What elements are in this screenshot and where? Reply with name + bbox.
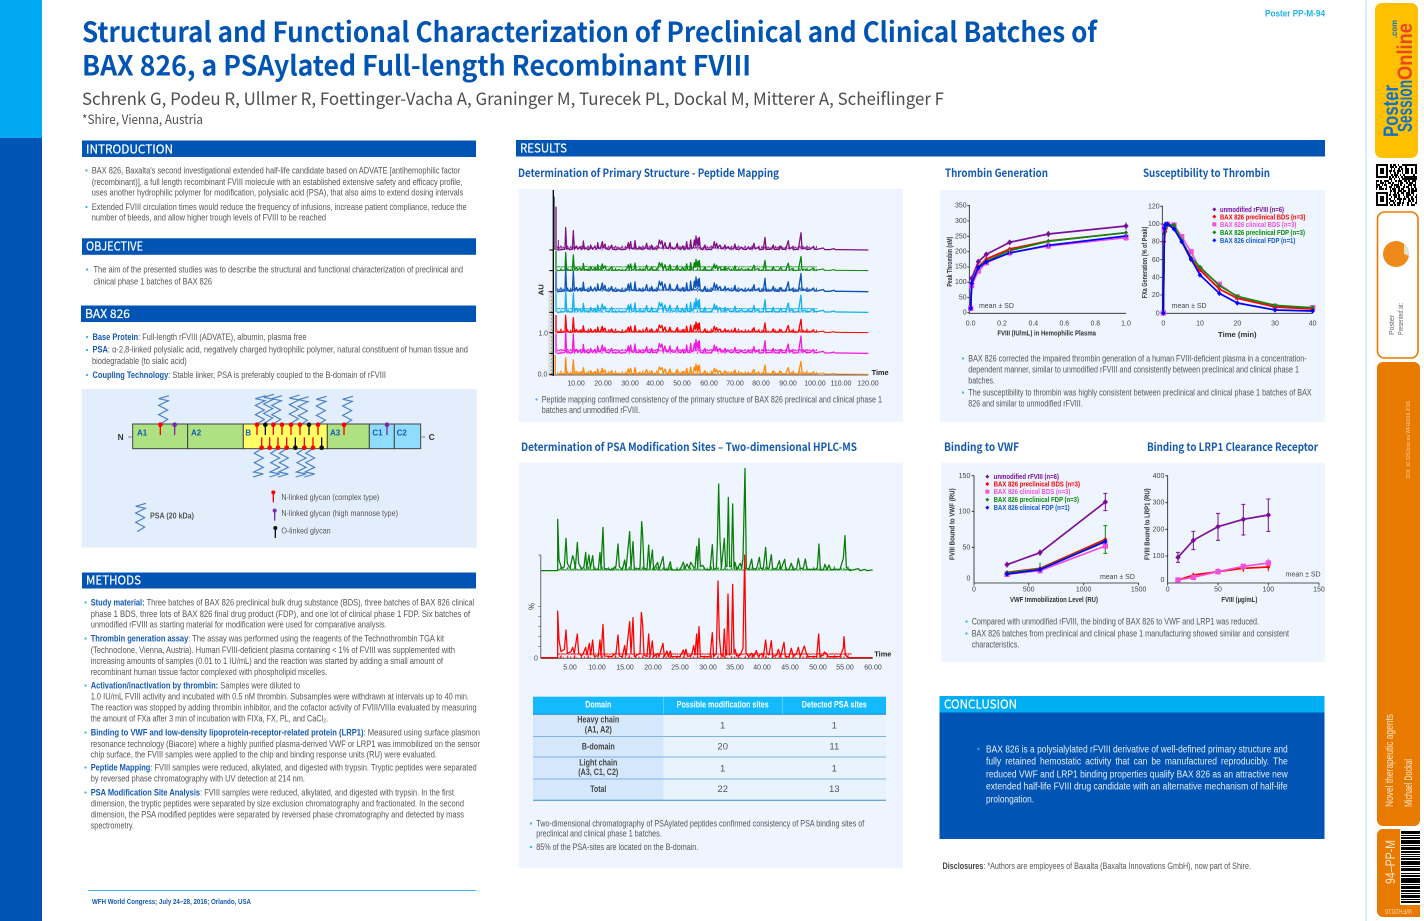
chart: two-dimensional HPLC-MS: 0	[534, 655, 538, 662]
text: objective	[86, 265, 463, 287]
text: methods bullets: Study material: Three batches of BAX 826 preclinical bulk drug substance (BDS), three batches of BAX 826 clinical	[91, 598, 474, 608]
text: thrombin caption: batches.	[968, 375, 995, 385]
glycans	[159, 423, 389, 449]
axis labels: 70.00	[726, 380, 744, 387]
domain labels: C1	[372, 429, 383, 438]
heading: peptide mapping: Determination of Primary Structure - Peptide Mapping	[518, 165, 779, 181]
trace: red	[556, 315, 868, 333]
trace: magenta	[556, 331, 868, 354]
axis labels: 55.00	[836, 664, 854, 671]
text: methods bullets: increasing amounts of samples (0.01 to 1 IU/mL) and the reaction was started by adding a small amount of	[91, 656, 443, 666]
trace: light blue	[556, 290, 868, 313]
panel: PSA modification sites	[518, 439, 903, 868]
logo: PosterSessionOnline: Online	[1394, 23, 1417, 80]
chart: binding to LRP1: 50	[1214, 587, 1222, 594]
chart: peptide map chromatograms: AU	[536, 284, 545, 295]
axis labels: 15.00	[616, 664, 634, 671]
text: methods bullets	[84, 598, 480, 831]
axis labels: 5.00	[563, 664, 577, 671]
heading: introduction	[82, 140, 476, 158]
axes	[548, 190, 868, 376]
chart: susceptibility to thrombin: 120	[1148, 204, 1160, 211]
text: binding caption	[965, 617, 1289, 650]
text: methods bullets: PSA Modification Site Analysis: FVIII samples were reduced, alkylated, and digested with trypsin. In the first	[91, 788, 454, 798]
text: introduction bullets: uses another hydrophilic polymer for modification, polysialic acid (PSA), that also aims to extend dosing intervals	[92, 188, 464, 198]
heading: PSA modification sites: Determination of PSA Modification Sites – Two-dimensional HPLC-MS	[521, 439, 857, 455]
legend: BAX 826 preclinical BDS (n=3)	[994, 479, 1080, 488]
presented-at box	[1378, 212, 1418, 358]
table: PSA sites by domain: 11	[829, 742, 839, 753]
chart: binding to LRP1: 0	[1160, 577, 1164, 584]
table: PSA sites by domain: (A1, A2)	[585, 725, 612, 736]
orange bar: session info	[1377, 362, 1420, 826]
axis labels: 90.00	[779, 380, 797, 387]
chart: binding to LRP1: 100	[1153, 553, 1164, 560]
table: PSA sites by domain: 1	[832, 720, 837, 732]
heading: conclusion	[940, 696, 1324, 712]
text: objective: clinical phase 1 batches of BAX 826	[94, 277, 212, 287]
legend: unmodified rFVIII (n=6)	[994, 472, 1059, 481]
chart: binding to LRP1: FVIII (µg/mL)	[1221, 595, 1258, 604]
chart: susceptibility to thrombin: Time (min)	[1218, 330, 1257, 339]
chart: susceptibility to thrombin: 0	[1156, 310, 1160, 317]
chart: thrombin generation: 250	[955, 233, 967, 240]
chart: binding to VWF: 150	[959, 473, 970, 480]
text: BAX 826 bullets: biodegradable (to sialic acid)	[92, 356, 187, 366]
table: PSA sites by domain: Total	[590, 784, 606, 795]
chart: thrombin generation: Peak Thrombin (nM)	[945, 236, 954, 287]
panel: introduction	[82, 140, 476, 223]
domain labels: C2	[397, 429, 407, 438]
table: PSA sites by domain: (A3, C1, C2)	[578, 767, 618, 778]
text: conclusion: fully retained hemostatic activity that can be manufactured reproducibly. The	[986, 757, 1288, 768]
heading: BAX 826: BAX 826	[85, 305, 130, 322]
chart: binding to VWF: 1500	[1131, 587, 1147, 594]
legend: BAX 826 clinical BDS (n=3)	[1220, 220, 1297, 229]
text: thrombin caption: 826 and similar to unmodified rFVIII.	[968, 399, 1083, 409]
chart: binding to VWF: 500	[1023, 587, 1035, 594]
diagram: FVIII domains with PSA	[82, 389, 477, 548]
text: methods bullets: Binding to VWF and low-density lipoprotein-receptor-related protein (LRP1): Measured using surface plasmon	[91, 728, 480, 738]
chart: thrombin generation: 200	[955, 249, 967, 256]
orange bar: session info: DOI: 10.3252/pso.eu.WFH2016.2016	[1406, 401, 1412, 478]
trace: purple	[554, 197, 868, 250]
text: introduction bullets: number of bleeds, and allow higher trough levels of FVIII to be reached	[92, 213, 326, 223]
chart: binding to VWF: 100	[959, 509, 970, 516]
chart: thrombin generation: FVIII (IU/mL) in Hemophilic Plasma	[997, 328, 1097, 337]
chart: thrombin generation: 0.4	[1028, 320, 1038, 327]
table: PSA sites by domain	[533, 697, 886, 800]
text: methods bullets: Peptide Mapping: FVIII samples were reduced, alkylated, and digested with trypsin. Tryptic peptides were separated	[91, 763, 477, 773]
legend: BAX 826 clinical FDP (n=1)	[1220, 236, 1296, 245]
axis labels	[563, 664, 882, 671]
chart: binding to VWF: 50	[963, 544, 970, 551]
text: introduction bullets: Extended FVIII circulation times would reduce the frequency of infusions, increase patient compliance, reduce the	[92, 202, 467, 212]
chart: thrombin generation: mean ± SD	[979, 303, 1014, 310]
panel: conclusion	[940, 696, 1324, 839]
chart: binding to LRP1: 200	[1153, 526, 1164, 533]
chart: thrombin generation: 0.2	[997, 320, 1007, 327]
chart: binding to LRP1: 0	[1166, 587, 1170, 594]
chart: binding to VWF	[948, 472, 1147, 604]
text: methods bullets: The reaction was stopped by adding thrombin inhibitor, and the cofactor activity of FVIII/VIIIa evaluated by measuring	[91, 703, 477, 713]
text: objective: The aim of the presented studies was to describe the structural and functional characterization of preclinical and	[94, 265, 463, 275]
PSA chains	[159, 394, 353, 477]
heading: results	[516, 140, 1325, 156]
text: binding caption: characteristics.	[972, 640, 1019, 650]
chart: susceptibility to thrombin: 20	[1233, 320, 1241, 327]
text: methods bullets: spectrometry.	[91, 821, 134, 831]
chart: binding to VWF: 1000	[1076, 587, 1092, 594]
text: PSA sites caption: preclinical and clinical phase 1 batches.	[536, 829, 662, 839]
chart: binding to LRP1: mean ± SD	[1286, 572, 1321, 579]
legend: PSA	[136, 503, 194, 532]
orange tab: poster id with barcode	[1377, 829, 1420, 917]
text: methods bullets: resonance technology (Biacore) where a highly purified plasma-derived VWF or LRP1 was immobilized on the sensor	[91, 739, 480, 749]
axis labels: 60.00	[700, 380, 718, 387]
domain labels: A1	[137, 429, 148, 438]
affiliation: *Shire, Vienna, Austria	[82, 109, 203, 128]
chart: binding to LRP1: 400	[1153, 473, 1164, 480]
text: thrombin caption: BAX 826 corrected the impaired thrombin generation of a human FVIII-deficient plasma in a concentration-	[968, 354, 1307, 364]
chart: susceptibility to thrombin: 40	[1152, 274, 1160, 281]
chart: two-dimensional HPLC-MS: Time	[874, 650, 891, 659]
legend	[985, 472, 1080, 512]
domain labels: B	[245, 429, 251, 438]
heading: objective: OBJECTIVE	[86, 238, 143, 254]
text: methods bullets: 1.0 IU/mL FVIII activity and incubated with 0.5 nM thrombin. Subsamples were withdrawn at intervals up to 40 min.	[91, 692, 469, 702]
chart: thrombin generation: 100	[955, 279, 967, 286]
axis labels	[567, 380, 879, 387]
chart: peptide map chromatograms: 0.0	[538, 372, 547, 379]
text: methods bullets: the amount of FXa after 3 min of incubation with FIXa, FX, PL, and CaCl₂.	[91, 714, 328, 724]
domain labels: A2	[191, 429, 202, 438]
heading: binding to VWF: Binding to VWF	[944, 439, 1020, 455]
logo: PosterSessionOnline: Session	[1394, 80, 1417, 132]
axis labels: 100.00	[804, 380, 826, 387]
chart: binding to LRP1	[1142, 473, 1325, 604]
table: PSA sites by domain: Heavy chain	[577, 715, 619, 726]
panel: binding	[941, 439, 1325, 662]
chart: susceptibility to thrombin: 30	[1271, 320, 1279, 327]
axis labels: 10.00	[567, 380, 585, 387]
title: Structural and Functional Characterization of Preclinical and Clinical Batches of	[82, 10, 1099, 50]
chart: thrombin generation: 0.0	[966, 320, 976, 327]
chart: thrombin generation	[945, 203, 1131, 337]
text: introduction bullets	[85, 166, 467, 223]
table: PSA sites by domain: B-domain	[582, 742, 615, 753]
presented-at box: Presented at:	[1398, 303, 1405, 335]
text: methods bullets: recombinant human tissue factor complexed with phospholipid micelles.	[91, 667, 327, 677]
text: conclusion	[977, 744, 1288, 806]
chart: two-dimensional HPLC-MS: %	[527, 603, 536, 610]
axis labels: 30.00	[699, 664, 717, 671]
chart: susceptibility to thrombin: 60	[1152, 257, 1160, 264]
text: peptide mapping caption: Peptide mapping confirmed consistency of the primary structure of BAX 826 preclinical and clinical phase 1	[542, 394, 882, 404]
logo: PosterSessionOnline: Poster	[1380, 85, 1403, 137]
axis labels: 60.00	[864, 664, 882, 671]
left colour band	[0, 0, 42, 921]
axis labels: 20.00	[594, 380, 612, 387]
text: methods bullets: unmodified rFVIII as starting material for modification were used for comparative analysis.	[91, 620, 387, 630]
text: peptide mapping caption	[535, 394, 882, 415]
chart: susceptibility to thrombin: mean ± SD	[1172, 303, 1207, 310]
legend: BAX 826 preclinical BDS (n=3)	[1220, 212, 1306, 221]
table: PSA sites by domain: 1	[832, 764, 837, 774]
chart: thrombin generation: 0	[963, 310, 967, 317]
panel: methods	[82, 572, 480, 831]
trace: green	[556, 251, 868, 271]
text: binding caption: BAX 826 batches from preclinical and clinical phase 1 manufacturing showed similar and consistent	[972, 629, 1289, 639]
axis labels: 30.00	[621, 380, 639, 387]
axis labels: 40.00	[646, 380, 664, 387]
text: introduction bullets: BAX 826, Baxalta's second investigational extended half-life candidate based on ADVATE [antihemophilic factor	[92, 166, 460, 176]
axis labels: 40.00	[753, 664, 771, 671]
chart: peptide map chromatograms	[536, 190, 889, 387]
QR code	[1376, 164, 1417, 206]
text: thrombin caption	[962, 354, 1312, 409]
text: PSA sites caption: Two-dimensional chromatography of PSAylated peptides confirmed consistency of PSA binding sites of	[536, 819, 865, 829]
chart: thrombin generation: 300	[955, 218, 967, 225]
chart: binding to VWF: FVIII Bound to VWF (RU)	[948, 488, 957, 560]
text: binding caption: Compared with unmodified rFVIII, the binding of BAX 826 to VWF and LRP1 was reduced.	[972, 617, 1259, 627]
heading: methods: METHODS	[86, 572, 141, 588]
axis labels: 25.00	[671, 664, 689, 671]
chart: thrombin generation: 50	[959, 295, 967, 302]
footer: congress: WFH World Congress; July 24–28, 2016; Orlando, USA	[92, 899, 251, 906]
table: PSA sites by domain: 20	[717, 742, 728, 753]
chart: binding to LRP1: FVIII Bound to LRP1 (RU)	[1142, 488, 1151, 560]
legend	[1212, 205, 1306, 245]
chart: binding to VWF: 0	[972, 587, 976, 594]
chart: binding to LRP1: 150	[1313, 587, 1325, 594]
title: BAX 826, a PSAylated Full-length Recombinant FVIII	[82, 44, 751, 84]
chart: susceptibility to thrombin	[1140, 204, 1317, 339]
legend: BAX 826 preclinical FDP (n=3)	[994, 495, 1079, 504]
table: PSA sites by domain: Detected PSA sites	[802, 700, 867, 710]
logo: PosterSessionOnline	[1375, 3, 1418, 158]
text: disclosures: Disclosures: *Authors are employees of Baxalta (Baxalta Innovations GmbH), now part of Shire.	[942, 861, 1251, 871]
text: BAX 826 bullets: Base Protein: Full-length rFVIII (ADVATE), albumin, plasma free	[92, 332, 306, 342]
trace: red	[541, 555, 873, 658]
heading: objective	[82, 238, 476, 255]
text: PSA sites caption: 85% of the PSA-sites are located on the B-domain.	[536, 842, 698, 852]
text: BAX 826 bullets	[86, 332, 468, 380]
heading: BAX 826	[81, 305, 476, 322]
axis labels: 120.00	[857, 380, 879, 387]
trace: blue	[556, 268, 868, 292]
chart: susceptibility to thrombin: 0	[1161, 320, 1165, 327]
axis labels: 50.00	[673, 380, 691, 387]
presented-at box: Poster	[1389, 314, 1396, 335]
text: conclusion: BAX 826 is a polysialylated rFVIII derivative of well-defined primary structure and	[986, 744, 1288, 755]
chart: thrombin generation: 150	[955, 263, 967, 270]
table: PSA sites by domain: 1	[720, 720, 725, 732]
heading: conclusion: CONCLUSION	[944, 696, 1017, 712]
authors: Schrenk G, Podeu R, Ullmer R, Foettinger-Vacha A, Graninger M, Turecek PL, Dockal M, Mitterer A, Scheiflinger F	[82, 85, 944, 110]
chart: binding to VWF: 0	[966, 576, 970, 583]
axis labels: 35.00	[726, 664, 744, 671]
chart: peptide map chromatograms: Time	[872, 368, 889, 377]
text: peptide mapping caption: batches and unmodified rFVIII.	[542, 405, 640, 415]
text: methods bullets: dimension, the PSA modified peptides were separated by reversed phase chromatography and detected by mass	[91, 810, 464, 820]
legend: glycans: O-linked glycan	[281, 526, 331, 536]
heading: methods	[82, 572, 476, 588]
chart: binding to VWF: mean ± SD	[1100, 574, 1135, 581]
chart: thrombin generation: 350	[955, 203, 967, 210]
chart: susceptibility to thrombin: 100	[1148, 221, 1160, 228]
orange tab: poster id with barcode: 94–PP-M	[1383, 840, 1398, 884]
domain labels: A3	[330, 429, 341, 438]
axis labels: 10.00	[588, 664, 606, 671]
text: methods bullets: Thrombin generation assay: The assay was performed using the reagents of the Technothrombin TGA kit	[91, 634, 444, 644]
chart: binding to LRP1: 100	[1263, 587, 1274, 594]
title	[82, 10, 1099, 84]
legend: BAX 826 clinical BDS (n=3)	[994, 487, 1071, 496]
chart: thrombin generation: 0.6	[1059, 320, 1069, 327]
panel: objective	[82, 238, 476, 287]
legend: glycans: N-linked glycan (high mannose type)	[281, 508, 398, 518]
text: methods bullets: phase 1 BDS, three lots of BAX 826 final drug product (FDP), and one lot of clinical phase 1 FDP. Six batches of	[91, 609, 470, 619]
text: introduction bullets: (recombinant)], a full length recombinant FVIII molecule with an established extensive safety and efficacy profile,	[92, 177, 462, 187]
diagram: FVIII domains with PSA: N	[118, 432, 124, 442]
legend: unmodified rFVIII (n=6)	[1220, 205, 1284, 214]
domain labels	[137, 429, 407, 438]
table: PSA sites by domain: Domain	[585, 700, 611, 710]
panel: BAX 826	[81, 305, 477, 548]
orange bar: session info: Novel therapeutic agents	[1384, 714, 1396, 807]
axis labels: 80.00	[752, 380, 770, 387]
text: conclusion: reduced VWF and LRP1 binding properties qualify BAX 826 as an attractive new	[986, 769, 1288, 780]
table: PSA sites by domain: 22	[717, 784, 728, 795]
text: BAX 826 bullets: Coupling Technology: Stable linker, PSA is preferably coupled to the B-domain of rFVIII	[92, 370, 386, 380]
chart: two-dimensional HPLC-MS	[527, 468, 891, 671]
heading: susceptibility: Susceptibility to Thrombin	[1143, 165, 1270, 181]
sidebar	[1366, 0, 1420, 921]
heading: binding to LRP1: Binding to LRP1 Clearance Receptor	[1147, 439, 1318, 455]
table: PSA sites by domain: 1	[720, 764, 725, 774]
trace: orange	[555, 355, 868, 375]
chart: thrombin generation: 1.0	[1121, 320, 1131, 327]
table: PSA sites by domain: Light chain	[579, 758, 617, 769]
chart: thrombin generation: 0.8	[1090, 320, 1100, 327]
text: BAX 826 bullets: PSA: α-2,8-linked polysialic acid, negatively charged hydrophilic polymer, natural constituent of human tissue and	[92, 345, 468, 355]
axis labels: 50.00	[809, 664, 827, 671]
table: PSA sites by domain: Possible modification sites	[677, 700, 769, 710]
legend: glycans	[271, 490, 398, 538]
diagram: FVIII domains with PSA: C	[429, 432, 435, 442]
text: methods bullets: (Technoclone, Vienna, Austria). Human FVIII-deficient plasma containing < 1% of FVIII was supplemented with	[91, 645, 455, 655]
chart: susceptibility to thrombin: 10	[1196, 320, 1204, 327]
chart: susceptibility to thrombin: FXa Generation (% of Peak)	[1140, 226, 1149, 298]
chart: binding to VWF: VWF Immobilization Level (RU)	[1010, 595, 1098, 604]
legend: BAX 826 clinical FDP (n=1)	[994, 503, 1070, 512]
panel: peptide mapping	[518, 165, 903, 422]
domain bar	[128, 424, 425, 449]
heading: results: RESULTS	[520, 140, 567, 156]
text: thrombin caption: dependent manner, similar to unmodified rFVIII and consistently between preclinical and clinical phase 1	[968, 365, 1299, 375]
text: methods bullets: chip surface, the FVIII samples were applied to the chip and binding response units (RU) were evaluated.	[91, 750, 437, 760]
legend: glycans: N-linked glycan (complex type)	[281, 492, 380, 502]
text: methods bullets: dimension, the tryptic peptides were separated by size exclusion chromatography and fractionated. In the second	[91, 799, 464, 809]
axis labels: 45.00	[781, 664, 799, 671]
orange tab: poster id with barcode: WFH2016	[1385, 907, 1412, 914]
chart: susceptibility to thrombin: 20	[1152, 292, 1160, 299]
text: methods bullets: Activation/inactivation by thrombin: Samples were diluted to	[91, 681, 300, 691]
legend: BAX 826 preclinical FDP (n=3)	[1220, 228, 1305, 237]
text: PSA sites caption	[530, 819, 865, 852]
panel: thrombin	[940, 165, 1325, 422]
chart: peptide map chromatograms: 1.0	[538, 330, 548, 337]
orange bar: session info: Michael Dockal	[1403, 759, 1415, 807]
chart: susceptibility to thrombin: 80	[1152, 239, 1160, 246]
heading: thrombin generation: Thrombin Generation	[945, 165, 1048, 181]
chart: binding to LRP1: 300	[1153, 500, 1164, 507]
heading: introduction: INTRODUCTION	[86, 140, 173, 158]
table: PSA sites by domain: 13	[829, 784, 840, 795]
text: conclusion: prolongation.	[986, 795, 1034, 806]
poster number: Poster PP-M-94	[1265, 8, 1326, 20]
axes	[538, 555, 873, 659]
trace: green	[541, 468, 873, 571]
axis labels: 20.00	[644, 664, 662, 671]
chart: susceptibility to thrombin: 40	[1309, 320, 1317, 327]
text: thrombin caption: The susceptibility to thrombin was highly consistent between preclinical and clinical phase 1 batches of BAX	[968, 388, 1312, 398]
logo: PosterSessionOnline: .com	[1390, 20, 1399, 38]
text: conclusion: extended half-life FVIII drug candidate with an alternative mechanism of half-life	[986, 781, 1288, 792]
legend: PSA: PSA (20 kDa)	[150, 512, 194, 521]
text: methods bullets: by reversed phase chromatography with UV detection at 214 nm.	[91, 774, 305, 784]
axis labels: 110.00	[831, 380, 852, 387]
